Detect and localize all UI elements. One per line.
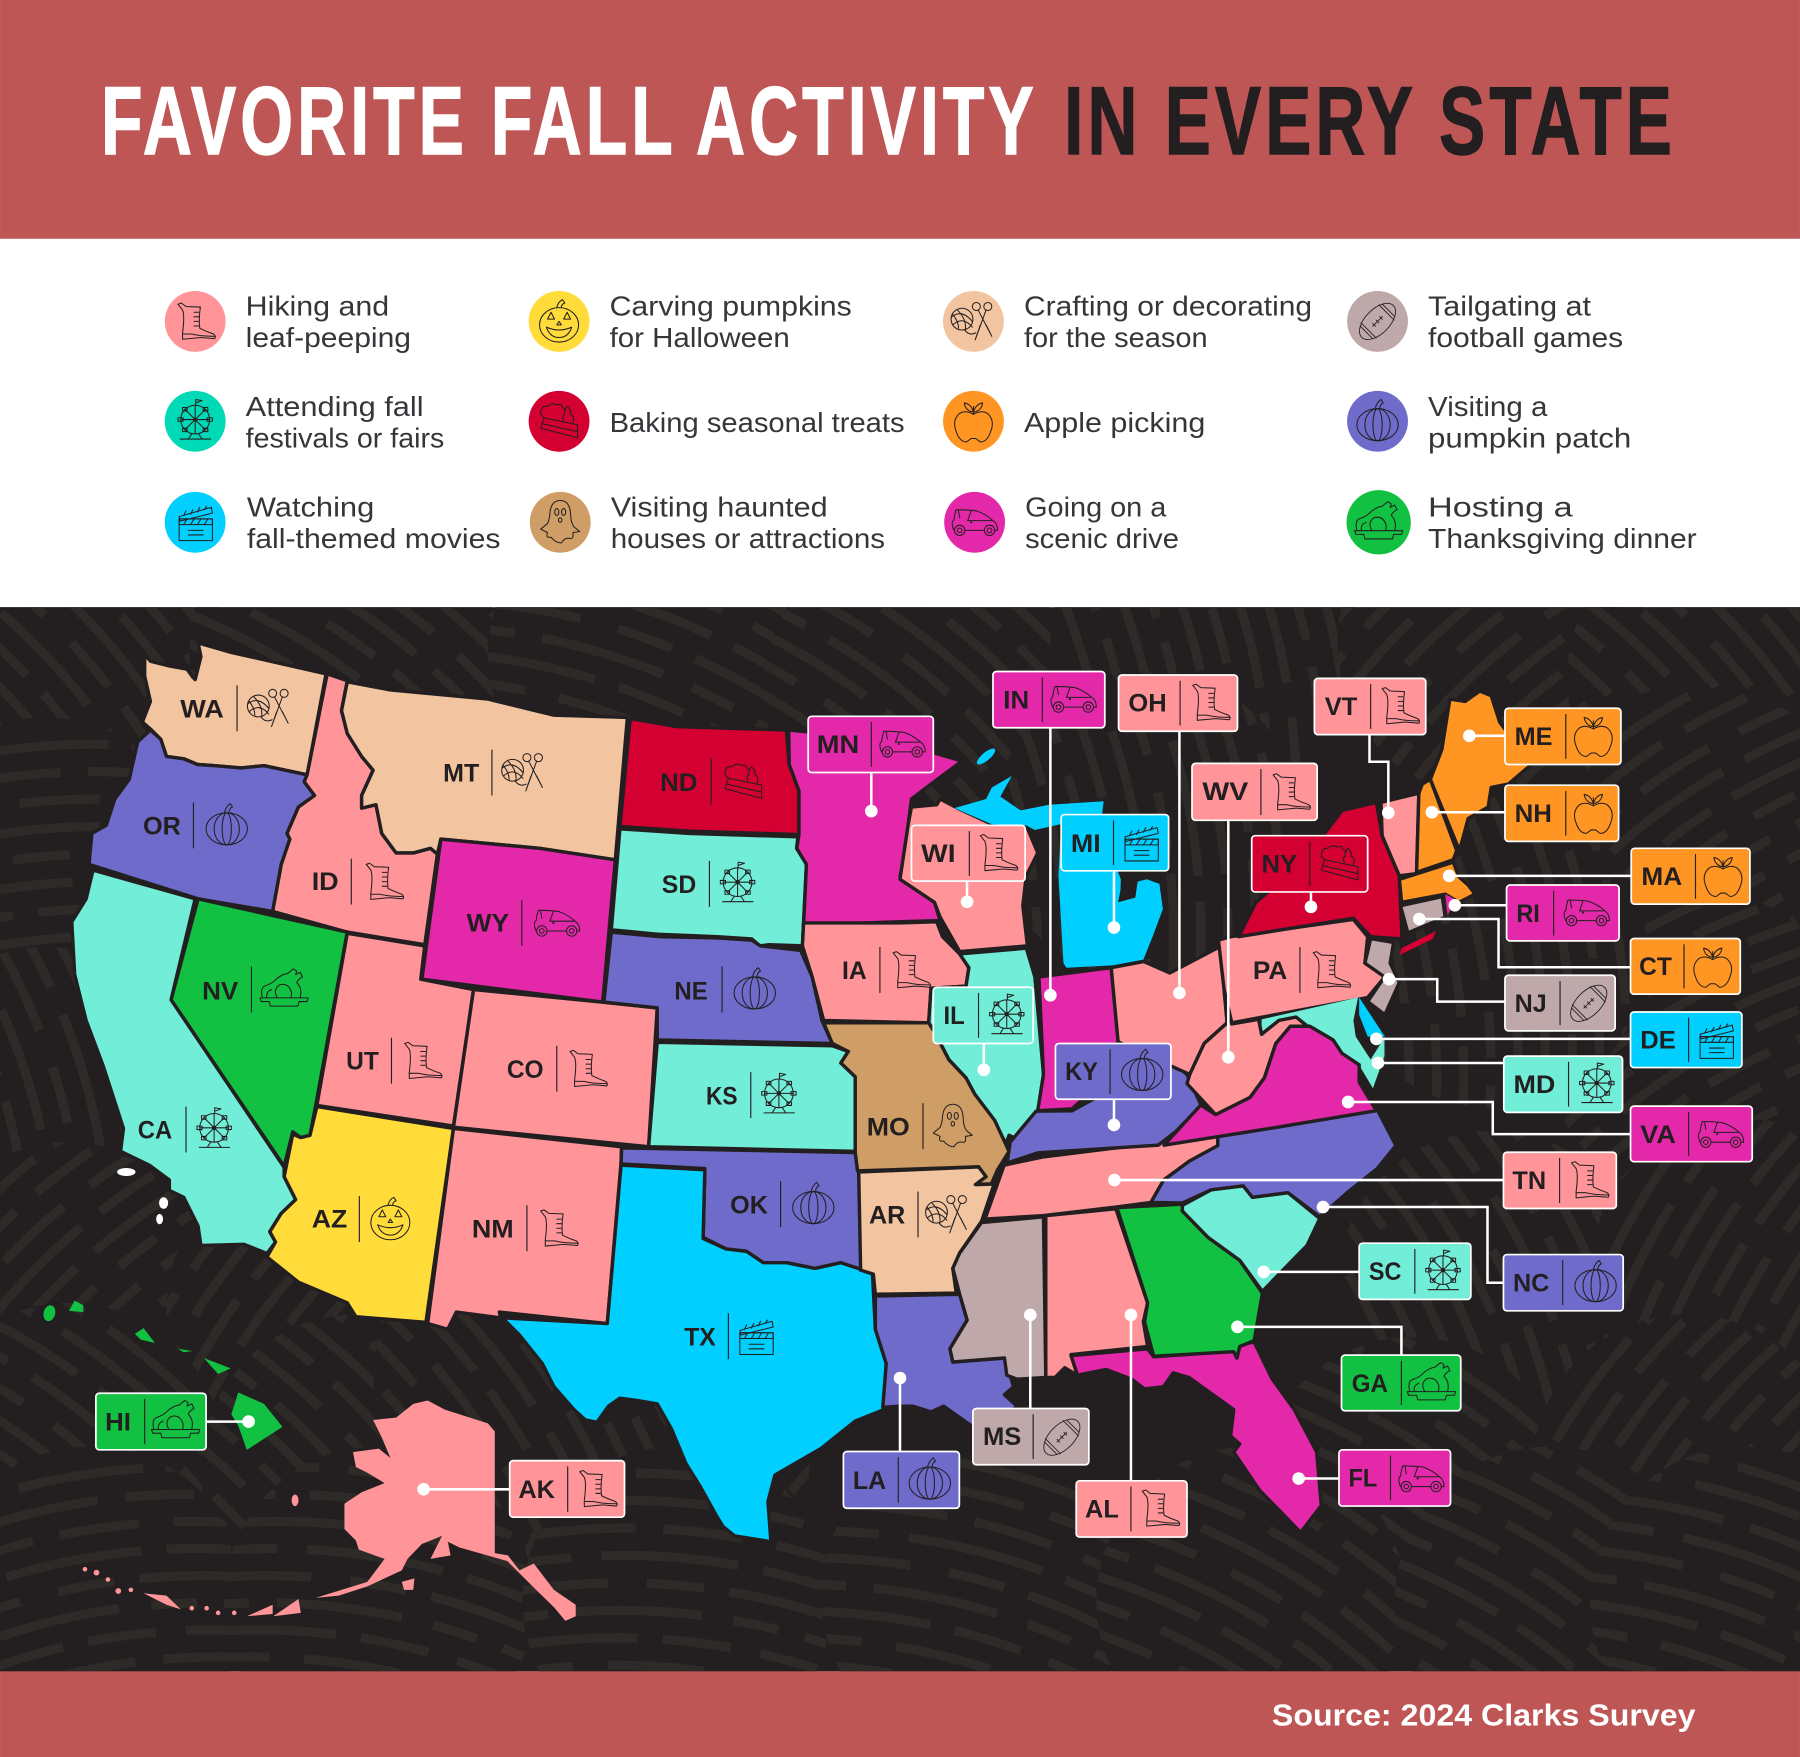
state: TN (985, 1136, 1218, 1219)
state: OK (621, 1148, 861, 1272)
label: MT (443, 750, 542, 796)
label: KS: KS (706, 1082, 738, 1110)
legend item: pumpkin patch (1347, 391, 1631, 454)
label: OR (143, 802, 247, 848)
label: NM (472, 1205, 578, 1251)
legend item: tailgating: football games (1428, 322, 1623, 353)
state: MO (824, 1023, 1009, 1184)
label: UT: UT (346, 1047, 379, 1075)
label: ND: ND (660, 769, 697, 797)
legend item: scenic drive: Going on a (1025, 492, 1167, 523)
label: PA: PA (1253, 957, 1287, 985)
legend item: thanksgiving: Thanksgiving dinner (1428, 523, 1697, 554)
state: WV (1187, 990, 1308, 1115)
callout: NC: NC (1513, 1269, 1549, 1297)
callout: FL: FL (1348, 1465, 1377, 1493)
state: IN (1038, 968, 1118, 1111)
legend item: carving pumpkins: for Halloween (610, 322, 790, 353)
legend item: haunted houses: houses or attractions (611, 523, 885, 554)
state: OH (1111, 946, 1227, 1074)
state: NC (1151, 1109, 1396, 1217)
state: MA (1399, 862, 1475, 902)
callout: NC (1317, 1201, 1623, 1311)
label: CO (507, 1046, 607, 1092)
legend item: carving pumpkins (529, 291, 852, 353)
legend item: tailgating (1347, 291, 1623, 353)
state: NE (604, 932, 832, 1043)
callout: IL: IL (944, 1002, 965, 1030)
label: CA: CA (138, 1117, 172, 1145)
state: CA (72, 870, 296, 1254)
legend item: pumpkin patch: Visiting a (1428, 391, 1548, 422)
state: UT (317, 933, 474, 1126)
state: ME (1430, 691, 1531, 851)
legend item: baking (529, 391, 905, 452)
callout: AL (1076, 1309, 1187, 1537)
state: AZ (267, 1107, 453, 1322)
state: NV (171, 899, 347, 1166)
callout: OH (1119, 675, 1237, 999)
legend item: hiking: leaf-peeping (246, 322, 411, 353)
callout: HI: HI (105, 1408, 131, 1436)
callout: AK (417, 1461, 625, 1517)
callout: MS: MS (983, 1423, 1021, 1451)
callout: MS (973, 1309, 1089, 1465)
legend (165, 291, 1697, 554)
state: HI (42, 1301, 282, 1450)
label: WY: WY (467, 910, 509, 938)
label: PA (1253, 947, 1351, 993)
callout: MI: MI (1071, 830, 1101, 858)
channel islands (117, 1168, 168, 1224)
state: WI (900, 799, 1038, 952)
state: IL (929, 948, 1043, 1143)
label: AR: AR (869, 1202, 905, 1230)
callout: NY: NY (1261, 850, 1297, 878)
callout: SC (1257, 1243, 1471, 1299)
state: NJ (1365, 939, 1399, 1015)
callout: AL: AL (1085, 1496, 1119, 1524)
label: TX: TX (684, 1323, 716, 1351)
state: SC (1182, 1186, 1320, 1291)
callout: AK: AK (518, 1476, 555, 1504)
label: UT (346, 1038, 442, 1084)
legend item: festivals: festivals or fairs (246, 423, 444, 454)
callout: NH (1426, 785, 1619, 841)
label: AZ: AZ (312, 1206, 347, 1234)
callout: NH: NH (1515, 800, 1552, 828)
callout: LA: LA (853, 1467, 886, 1495)
callout: OH: OH (1128, 690, 1167, 718)
state: MI (954, 746, 1163, 968)
callout: MN: MN (817, 731, 859, 759)
callout: WV (1192, 763, 1317, 1064)
callout: MA: MA (1641, 863, 1682, 891)
state: CT (1400, 897, 1445, 933)
callout: IL (933, 987, 1033, 1076)
state: AL (1046, 1209, 1148, 1377)
callout: DE: DE (1640, 1027, 1676, 1055)
label: IA: IA (842, 957, 867, 985)
label: NV: NV (202, 977, 238, 1005)
state: MS (950, 1217, 1046, 1379)
label: NV (202, 967, 308, 1012)
callout: HI (96, 1393, 255, 1450)
callout: VA (1342, 1096, 1752, 1162)
legend item: haunted houses: Visiting haunted (611, 492, 828, 523)
state: NY (1239, 802, 1436, 955)
label: NE: NE (674, 977, 708, 1005)
callout: KY (1055, 1043, 1171, 1131)
state: GA (1117, 1204, 1262, 1358)
footer band (0, 1671, 1800, 1757)
callout: DE (1370, 1012, 1742, 1068)
callout: ME (1463, 708, 1621, 765)
map background (0, 607, 1800, 1671)
legend item: haunted houses (530, 492, 885, 554)
label: KS (706, 1072, 796, 1118)
label: MT: MT (443, 760, 480, 788)
callout: IN: IN (1003, 686, 1029, 714)
header band (0, 0, 1800, 239)
callout: NY (1252, 836, 1368, 913)
legend item: scenic drive: scenic drive (1025, 523, 1179, 554)
label: WA: WA (180, 695, 224, 723)
state: RI (1445, 894, 1457, 915)
legend item: apple picking: Apple picking (1024, 407, 1205, 438)
callout: KY: KY (1065, 1058, 1098, 1086)
title: FAVORITE FALL ACTIVITY (101, 68, 1038, 175)
label: AZ (312, 1196, 410, 1242)
legend item: tailgating: Tailgating at (1428, 291, 1591, 322)
state: SD (611, 829, 806, 946)
callout: LA (843, 1372, 959, 1508)
callout: ME: ME (1515, 723, 1552, 751)
callout: NJ (1383, 973, 1615, 1031)
label: IA (842, 947, 930, 993)
callout: IN (993, 672, 1105, 1002)
label: OK (730, 1181, 834, 1227)
callout: MI (1061, 815, 1169, 934)
state: ND (620, 719, 799, 835)
callout: TN: TN (1512, 1167, 1546, 1195)
callout: RI: RI (1516, 900, 1540, 928)
legend item: movies (165, 492, 501, 554)
state: KS (649, 1042, 855, 1151)
label: AR (869, 1192, 966, 1237)
state: VT (1381, 793, 1419, 876)
callout: TN (1108, 1152, 1616, 1209)
legend item: hiking: Hiking and (246, 291, 389, 322)
legend item: baking: Baking seasonal treats (610, 407, 905, 438)
state: CO (453, 990, 657, 1147)
callout: FL (1292, 1450, 1451, 1506)
label: MO: MO (867, 1113, 910, 1141)
legend item: thanksgiving: Hosting a (1428, 492, 1574, 523)
callout: RI (1449, 885, 1619, 941)
legend item: apple picking (943, 391, 1205, 452)
label: CA (138, 1107, 231, 1153)
callout: MD (1372, 1056, 1622, 1112)
callout: SC: SC (1369, 1258, 1401, 1286)
label: WA (180, 685, 288, 731)
label: ID: ID (312, 868, 339, 896)
legend item: festivals (165, 391, 444, 454)
map panel (0, 607, 1800, 1672)
state: MT (342, 682, 627, 860)
label: WY (467, 900, 580, 946)
legend item: festivals: Attending fall (246, 391, 424, 422)
callout: CT: CT (1639, 953, 1672, 981)
label: SD (662, 861, 755, 907)
label: OK: OK (730, 1191, 768, 1219)
callout: GA: GA (1352, 1370, 1388, 1398)
legend item: movies: fall-themed movies (247, 523, 501, 554)
source note: Source: 2024 Clarks Survey (1272, 1697, 1696, 1732)
legend item: scenic drive (944, 492, 1179, 554)
state: NM (428, 1128, 622, 1329)
label: NM: NM (472, 1215, 514, 1243)
label: NE (674, 967, 775, 1012)
state: AR (859, 1167, 994, 1294)
state: KY (1007, 1060, 1201, 1162)
callout: MD: MD (1513, 1071, 1555, 1099)
label: CO: CO (507, 1056, 544, 1084)
legend item: hiking (165, 291, 411, 353)
state: VA (1164, 1026, 1376, 1145)
state: OR (89, 730, 315, 911)
state: PA (1218, 919, 1385, 1023)
callout: VA: VA (1640, 1121, 1676, 1149)
state: LA (875, 1294, 1017, 1426)
state: MD (1262, 998, 1384, 1088)
callout: WV: WV (1202, 778, 1248, 806)
state: IA (802, 922, 969, 1023)
legend item: carving pumpkins: Carving pumpkins (610, 291, 852, 322)
callout: VT: VT (1325, 693, 1358, 721)
label: MO (867, 1103, 972, 1149)
callout: GA (1231, 1321, 1461, 1411)
state: NH (1417, 779, 1457, 872)
state: AK (83, 1400, 576, 1621)
callout: NJ: NJ (1515, 990, 1547, 1018)
label: ID (312, 859, 404, 905)
callout: WI (911, 825, 1025, 908)
label: SD: SD (662, 871, 696, 899)
state: MN (789, 730, 962, 925)
callout: WI: WI (921, 840, 956, 868)
legend item: movies: Watching (247, 492, 374, 523)
legend item: crafting: Crafting or decorating (1024, 291, 1312, 322)
label: OR: OR (143, 813, 181, 841)
state: WY (422, 839, 615, 1002)
state: WA (142, 643, 326, 775)
state: ID (273, 674, 437, 945)
legend item: thanksgiving (1347, 490, 1697, 554)
label: TX (684, 1313, 773, 1359)
label: ND (660, 759, 762, 805)
legend item: pumpkin patch: pumpkin patch (1428, 423, 1631, 454)
state: DE (1359, 998, 1385, 1037)
state: FL (1071, 1342, 1321, 1532)
callout: VT (1314, 678, 1426, 819)
state: TX (502, 1165, 887, 1542)
callout: MA (1443, 848, 1750, 904)
callout: CT (1413, 913, 1740, 994)
legend item: crafting (943, 291, 1312, 353)
callout: MN (808, 716, 933, 817)
legend item: crafting: for the season (1024, 322, 1208, 353)
